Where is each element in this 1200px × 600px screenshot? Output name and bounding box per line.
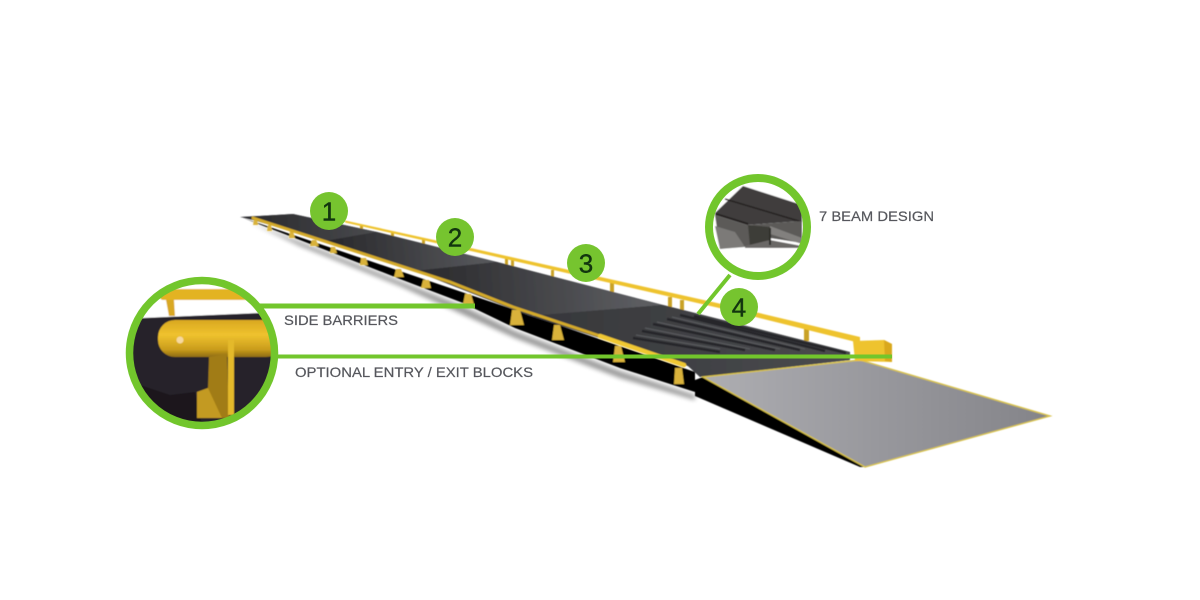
marker 1 (310, 192, 348, 230)
yellow end block (853, 340, 892, 362)
marker 1: 1 (322, 196, 336, 226)
deck section 1 (240, 214, 377, 241)
inset circle: 7 beam design close-up (705, 174, 811, 280)
leader line: beam design (698, 275, 730, 314)
inset circle: side barrier close-up (126, 276, 278, 430)
deck section 3 (415, 262, 663, 316)
marker 4 (720, 288, 758, 326)
far side rail (345, 220, 860, 343)
label: side barriers: SIDE BARRIERS (284, 312, 398, 328)
marker 3 (567, 244, 605, 282)
label: optional entry exit blocks: OPTIONAL ENTRY / EXIT BLOCKS (295, 364, 533, 380)
near side posts (253, 220, 684, 384)
under-deck shadow (250, 222, 695, 400)
marker 2: 2 (448, 222, 462, 252)
near side rail (253, 218, 684, 365)
marker 2 (436, 218, 474, 256)
deck section 2 (325, 232, 497, 271)
leader line: optional entry exit blocks (278, 354, 892, 358)
leader line: side barriers (258, 304, 475, 308)
deck base (243, 214, 850, 377)
deck section 4 with beams (530, 305, 850, 377)
weighbridge infographic (126, 174, 1052, 468)
marker 4: 4 (732, 292, 746, 322)
label: 7 beam design: 7 BEAM DESIGN (819, 208, 934, 224)
marker 3: 3 (579, 248, 593, 278)
entry / exit ramp (703, 360, 1050, 467)
weighbridge deck illustration (240, 214, 1050, 467)
entry ramp underside (695, 377, 865, 467)
